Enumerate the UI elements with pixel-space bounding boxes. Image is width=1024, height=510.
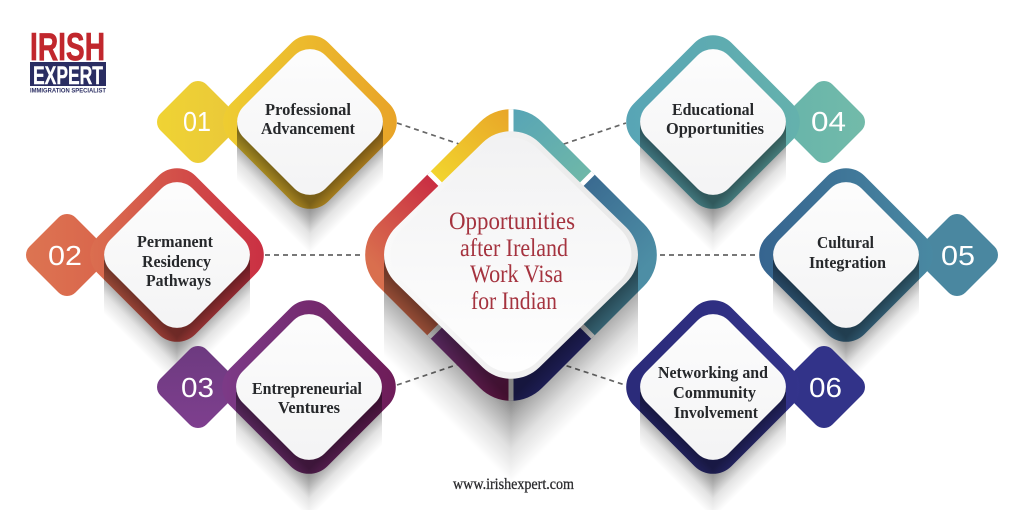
central title: after Ireland bbox=[460, 235, 568, 262]
central title: Opportunities bbox=[449, 208, 575, 235]
label 06 bbox=[658, 363, 768, 422]
diamond card 02 bbox=[79, 157, 275, 387]
diamond card 01 bbox=[212, 24, 408, 254]
website footer: www.irishexpert.com bbox=[453, 476, 574, 493]
number badge 06 bbox=[778, 341, 870, 433]
central white diamond bbox=[367, 115, 655, 395]
central title: for Indian bbox=[471, 288, 557, 315]
label 02 bbox=[137, 232, 213, 290]
label 02: Pathways bbox=[146, 271, 211, 290]
panel: 05 Cultural Integration bbox=[748, 157, 1003, 387]
label 02: Residency bbox=[142, 252, 211, 271]
number badge 04: 04 bbox=[811, 106, 846, 137]
six colour ring segments bbox=[365, 109, 657, 401]
panel: 03 Entrepreneurial Ventures bbox=[152, 289, 407, 510]
label 05: Cultural bbox=[817, 233, 874, 252]
number badge 06: 06 bbox=[809, 372, 842, 403]
label 01: Professional bbox=[265, 100, 351, 119]
label 04: Educational bbox=[672, 100, 754, 119]
logo: Irish Expert: EXPERT bbox=[33, 62, 103, 90]
label 06: Involvement bbox=[674, 403, 758, 422]
number badge 05: 05 bbox=[941, 240, 975, 271]
number badge 04 bbox=[778, 76, 870, 168]
diamond card 04 bbox=[615, 24, 811, 254]
logo: Irish Expert: IRISH bbox=[30, 26, 105, 69]
label 01 bbox=[261, 100, 355, 138]
number badge 02: 02 bbox=[48, 240, 82, 271]
number badge 01: 01 bbox=[183, 106, 211, 137]
panel: central diamond bbox=[365, 109, 657, 474]
central title bbox=[449, 208, 575, 315]
diamond card 06 bbox=[615, 289, 811, 510]
label 03 bbox=[252, 379, 362, 417]
label 02: Permanent bbox=[137, 232, 213, 251]
number badge 03 bbox=[152, 341, 244, 433]
panel: 04 Educational Opportunities bbox=[615, 24, 870, 254]
panel: 06 Networking and Community Involvement bbox=[615, 289, 870, 510]
number badge 05 bbox=[911, 209, 1003, 301]
label 05: Integration bbox=[809, 253, 887, 272]
label 05 bbox=[809, 233, 887, 272]
central title: Work Visa bbox=[470, 261, 563, 288]
label 04: Opportunities bbox=[666, 119, 764, 138]
logo: Irish Expert bbox=[30, 26, 106, 94]
label 06: Networking and bbox=[658, 363, 768, 382]
diamond card 03 bbox=[211, 289, 407, 510]
number badge 02 bbox=[21, 209, 113, 301]
number badge 03: 03 bbox=[181, 372, 214, 403]
label 03: Entrepreneurial bbox=[252, 379, 362, 398]
label 06: Community bbox=[673, 383, 756, 402]
panel: 02 Permanent Residency Pathways bbox=[21, 157, 275, 387]
central drop shadow bbox=[384, 255, 638, 484]
label 03: Ventures bbox=[278, 398, 340, 417]
label 04 bbox=[666, 100, 764, 138]
panel: 01 Professional Advancement bbox=[152, 24, 408, 254]
label 01: Advancement bbox=[261, 119, 355, 138]
dashed connector lines bbox=[265, 123, 757, 385]
number badge 01 bbox=[152, 76, 244, 168]
logo: Irish Expert: IMMIGRATION SPECIALIST bbox=[30, 88, 106, 94]
diamond card 05 bbox=[748, 157, 944, 387]
